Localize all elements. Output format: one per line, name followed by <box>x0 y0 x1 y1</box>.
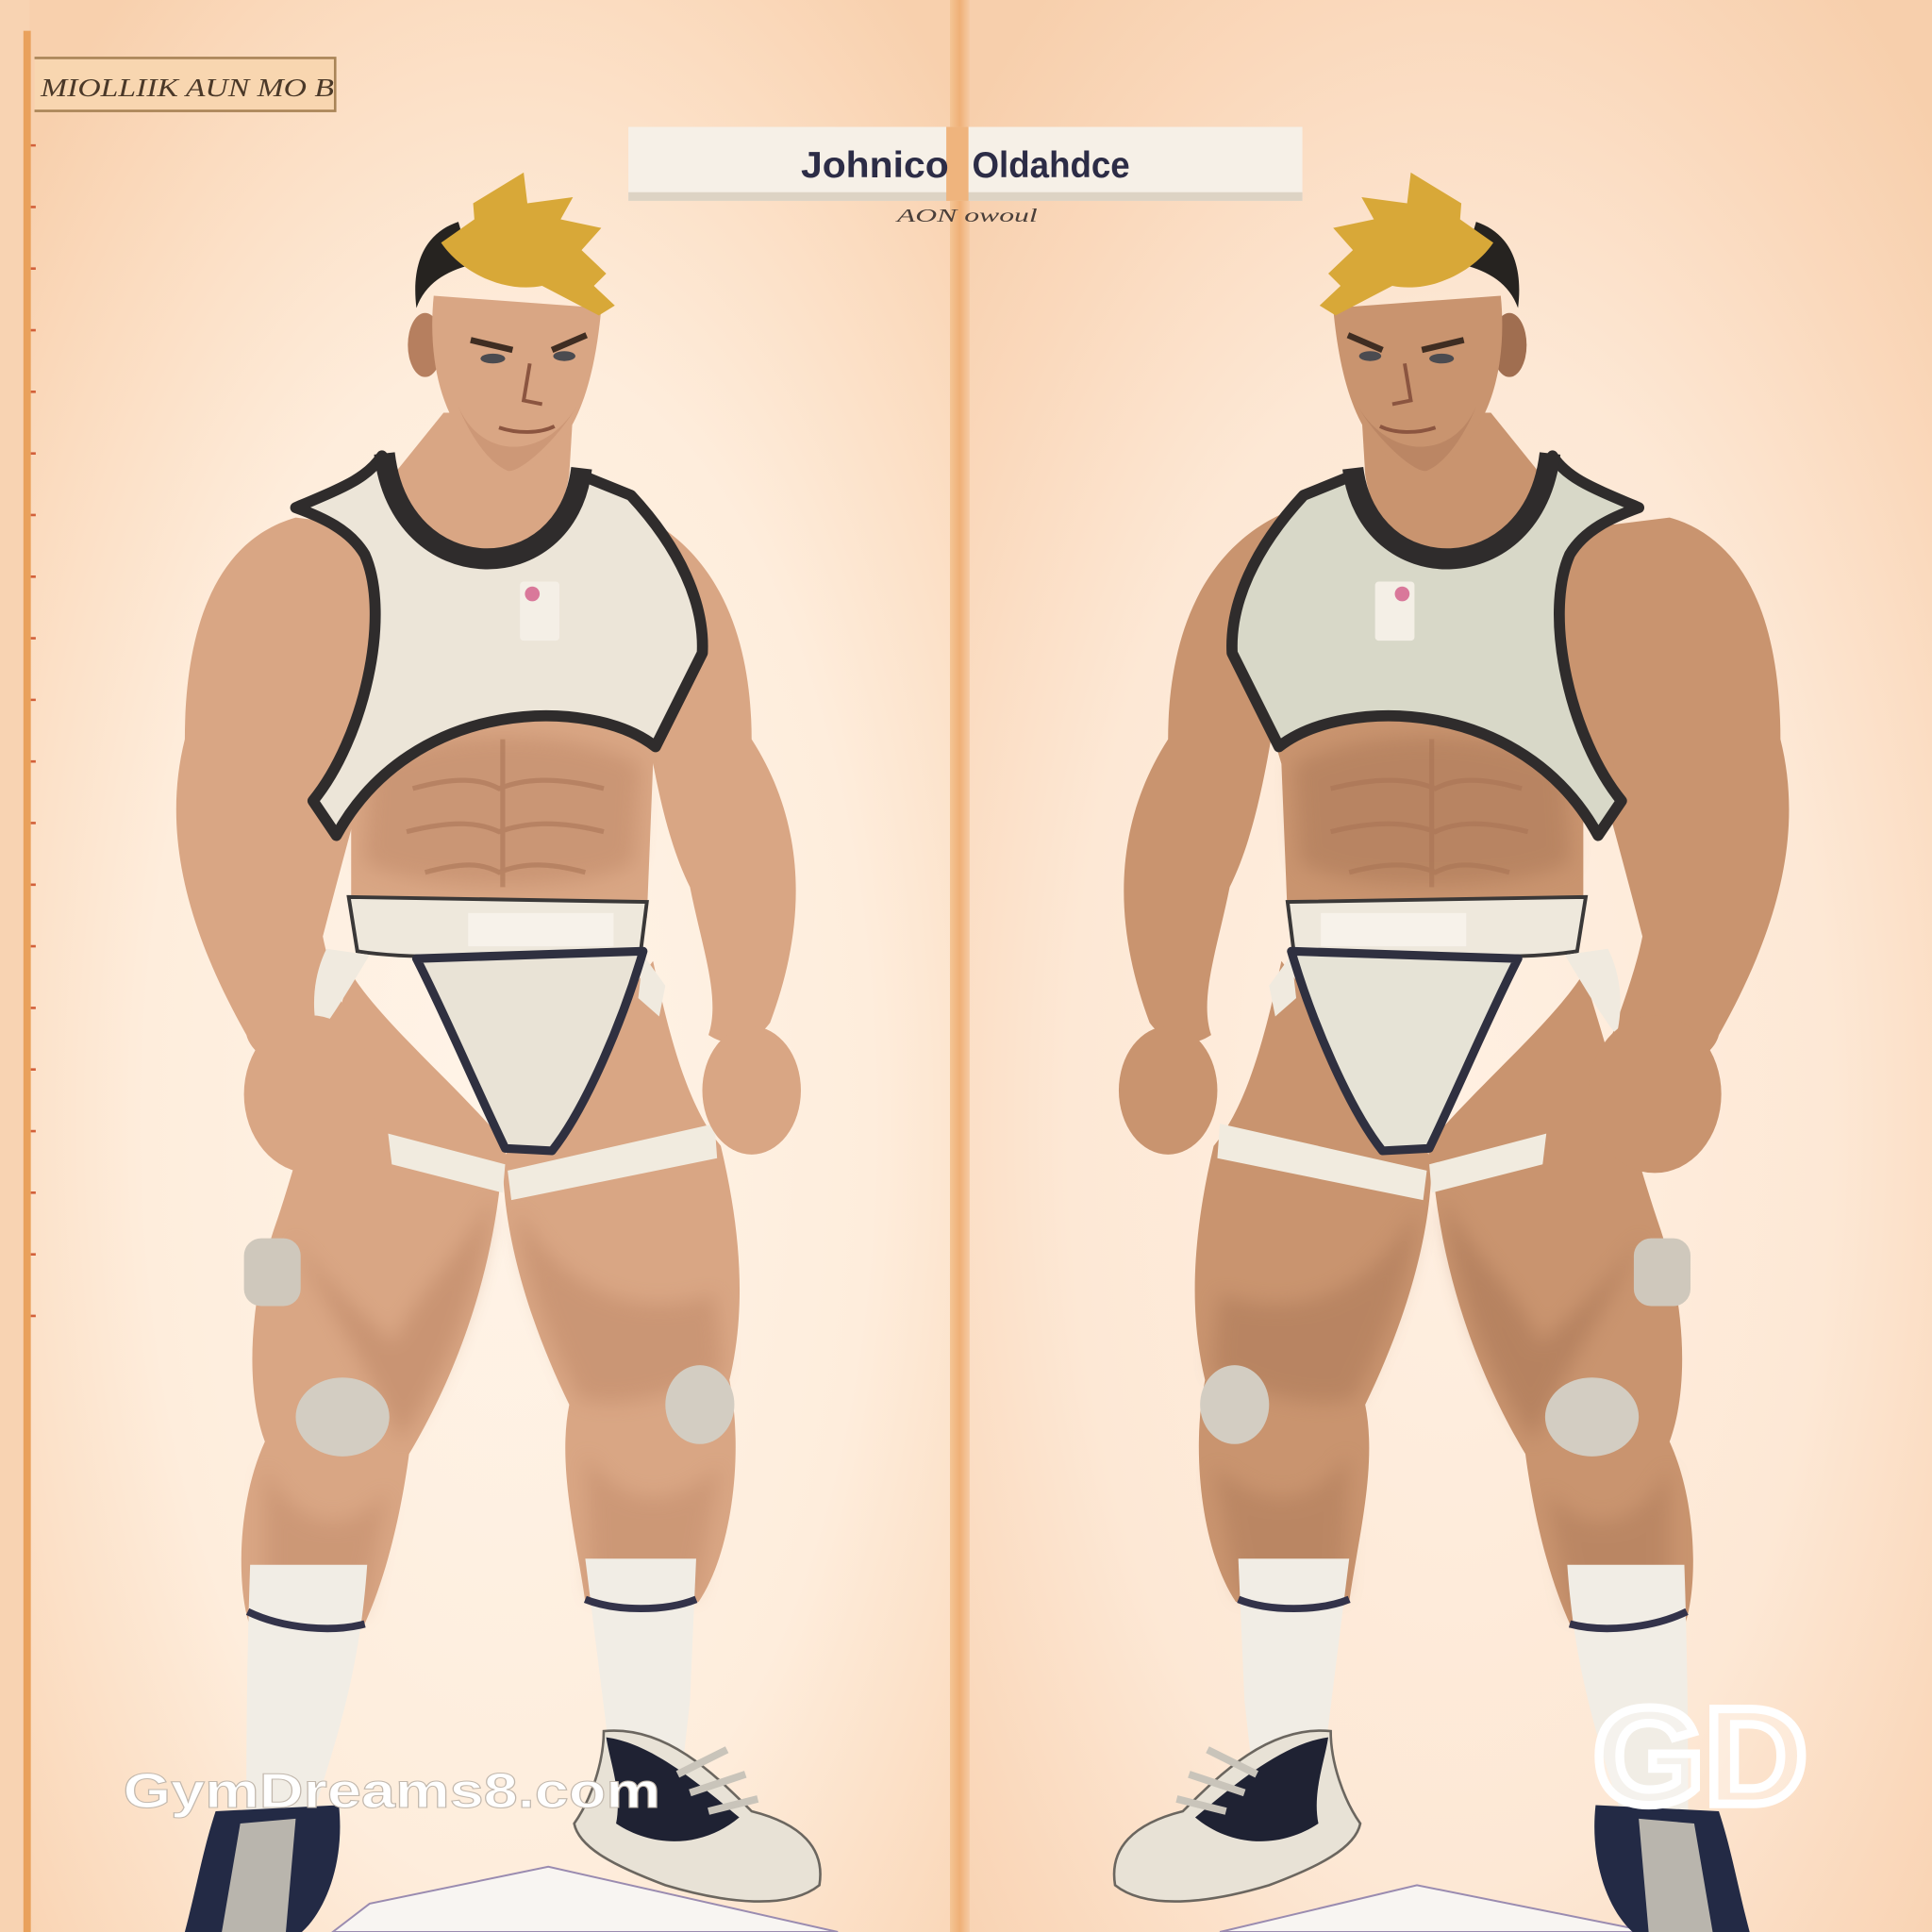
floor: right <box>1220 1885 1651 1932</box>
top-left label <box>35 58 335 111</box>
panel: left <box>29 0 951 1932</box>
watermark: logo: GD <box>1593 1679 1807 1833</box>
panel: right <box>969 0 1932 1932</box>
watermark: website: GymDreams8.com <box>124 1764 660 1819</box>
title plate: Oldahdce <box>973 145 1130 186</box>
title plate: Johnico <box>801 145 949 186</box>
floor: left <box>333 1867 838 1932</box>
ruler <box>24 31 36 1932</box>
top-left label: MIOLLIIK AUN MO B <box>40 74 334 102</box>
figure: left <box>176 173 821 1932</box>
title plate <box>628 127 1303 201</box>
figure: right <box>1114 173 1789 1932</box>
center divider <box>950 0 970 1932</box>
subtitle: AON owoul <box>894 207 1039 226</box>
